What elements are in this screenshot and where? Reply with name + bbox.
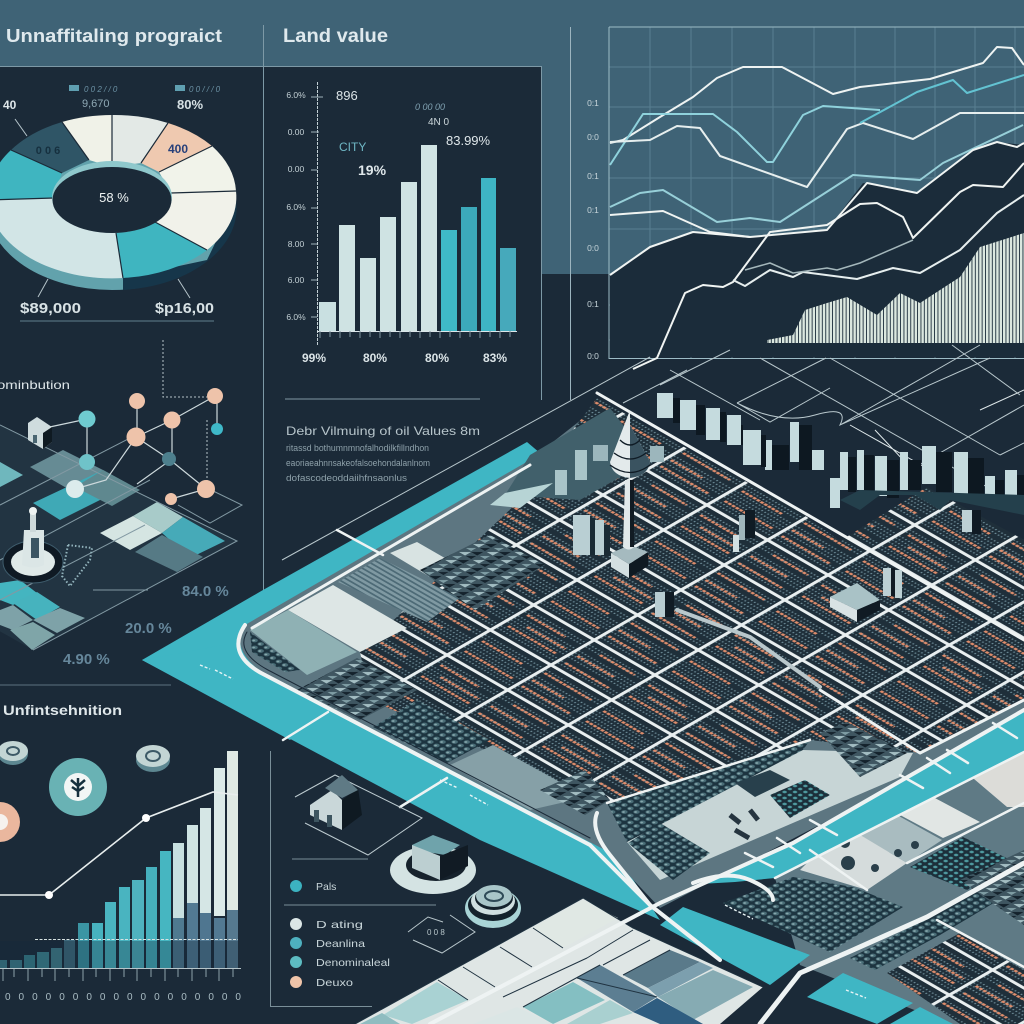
chart: donut: 400 bbox=[168, 142, 188, 156]
donut callouts: $89,000 bbox=[20, 300, 81, 317]
chart: rising bars with line bbox=[0, 751, 241, 1003]
icon: tower on rings bbox=[3, 507, 92, 586]
heading: unnaffitaling prograict: Unnaffitaling prograict bbox=[6, 26, 222, 46]
icon: house on disc bbox=[390, 835, 476, 894]
bar chart annotations bbox=[336, 88, 491, 178]
icon: label diamond bbox=[408, 915, 475, 953]
text block: debr vilmuing: ritassd bothumnmnofalhodilkfillndhon bbox=[286, 443, 429, 453]
icon: stacked coins bbox=[465, 885, 521, 928]
bar chart annotations: 4N 0 bbox=[428, 117, 450, 128]
chart: top-right line chart: 0:0 bbox=[587, 351, 599, 361]
icon: outline diamond with house bbox=[295, 775, 422, 855]
donut callouts: 40 bbox=[3, 98, 17, 112]
panel: legend: D ating bbox=[316, 919, 363, 931]
map: city blocks bbox=[360, 398, 1024, 803]
water: main river bbox=[142, 442, 660, 920]
chart: top-right line chart bbox=[587, 27, 1024, 369]
bar chart annotations: 19% bbox=[358, 162, 387, 178]
donut callouts: 9,670 bbox=[82, 98, 110, 110]
donut callouts: 0 0 / / / 0 bbox=[189, 85, 221, 94]
chart: top-right line chart: 0:1 bbox=[587, 299, 599, 309]
chart: land value bars: 6.0% bbox=[286, 202, 306, 212]
map: skyline bbox=[657, 393, 1024, 515]
board percentage labels bbox=[63, 583, 229, 668]
map: white roads bbox=[238, 393, 1024, 1024]
chart: top-right line chart: 0:1 bbox=[587, 205, 599, 215]
chart: land value bars: 80% bbox=[363, 351, 387, 365]
board percentage labels: 84.0 % bbox=[182, 583, 229, 600]
top teal band bbox=[0, 0, 1024, 274]
donut callouts: $p16,00 bbox=[155, 300, 214, 317]
text block: debr vilmuing bbox=[285, 399, 480, 483]
bar chart annotations: 83.99% bbox=[446, 133, 491, 148]
map: parcels on left side bbox=[250, 408, 650, 815]
bar chart annotations: 896 bbox=[336, 88, 358, 103]
chart: land value bars: 99% bbox=[302, 351, 326, 365]
chart: top-right line chart: 0:1 bbox=[587, 171, 599, 181]
board percentage labels: 4.90 % bbox=[63, 651, 110, 668]
panel: top-left and land value frame bbox=[0, 25, 570, 590]
bar chart annotations: 0 00 00 bbox=[415, 102, 445, 112]
chart: land value bars: 6.00 bbox=[288, 275, 305, 285]
map: bottom fields bbox=[355, 898, 763, 1024]
map: lower parcels bbox=[607, 722, 1024, 1024]
text block: debr vilmuing: eaoriaeahnnsakeofalsoehondalanlnom bbox=[286, 458, 430, 468]
map: tower landmark bbox=[593, 410, 664, 578]
panel: legend: Deuxo bbox=[316, 977, 353, 989]
chart: donut: 0 0 6 bbox=[36, 145, 60, 157]
map: land base bbox=[240, 405, 1024, 908]
map outlines above skyline bbox=[282, 345, 1024, 560]
water: canals and lower river bbox=[200, 665, 1024, 1024]
chart: land value bars: 0.00 bbox=[288, 164, 305, 174]
heading: land value: Land value bbox=[283, 26, 388, 47]
chart: land value bars bbox=[286, 82, 517, 365]
chart: top-right line chart: 0:0 bbox=[587, 132, 599, 142]
donut callouts bbox=[3, 85, 221, 321]
network diagram bbox=[45, 340, 223, 505]
chart: top-right line chart: 0:1 bbox=[587, 98, 599, 108]
chart: land value bars: 8.00 bbox=[288, 239, 305, 249]
donut callouts: 0 0 2 / / 0 bbox=[84, 85, 118, 94]
chart: land value bars: 0.00 bbox=[288, 127, 305, 137]
icon: small house bbox=[28, 417, 52, 449]
isometric chess board bbox=[0, 425, 242, 650]
donut callouts: 80% bbox=[177, 97, 203, 112]
bar chart annotations: CITY bbox=[339, 140, 366, 154]
map: city buildings bbox=[573, 510, 981, 622]
icon: label diamond: 0 0 8 bbox=[427, 928, 445, 937]
chart: land value bars: 83% bbox=[483, 351, 507, 365]
board percentage labels: 20.0 % bbox=[125, 620, 172, 637]
text block: debr vilmuing: Debr Vilmuing of oil Values 8m bbox=[286, 424, 480, 438]
icons: coins and circles bbox=[0, 741, 170, 842]
panel: legend: Deanlina bbox=[316, 938, 365, 950]
chart: rising bars with line: 0 0 0 0 0 0 0 0 0 0 0 0 0 0 0 0 0 0 bbox=[5, 992, 241, 1003]
chart: top-right line chart: 0:0 bbox=[587, 243, 599, 253]
panel: legend bbox=[270, 751, 436, 1006]
panel: legend: Pals bbox=[316, 881, 336, 893]
text block: debr vilmuing: dofascodeoddaiihfnsaonlus bbox=[286, 473, 408, 483]
heading: unfintsehnition: Unfintsehnition bbox=[3, 702, 122, 718]
chart: land value bars: 80% bbox=[425, 351, 449, 365]
panel: legend: Denominaleal bbox=[316, 957, 390, 969]
chart: land value bars: 6.0% bbox=[286, 90, 306, 100]
chart: donut bbox=[0, 115, 237, 290]
chart: donut: 58 % bbox=[99, 190, 129, 205]
chart: land value bars: 6.0% bbox=[286, 312, 306, 322]
